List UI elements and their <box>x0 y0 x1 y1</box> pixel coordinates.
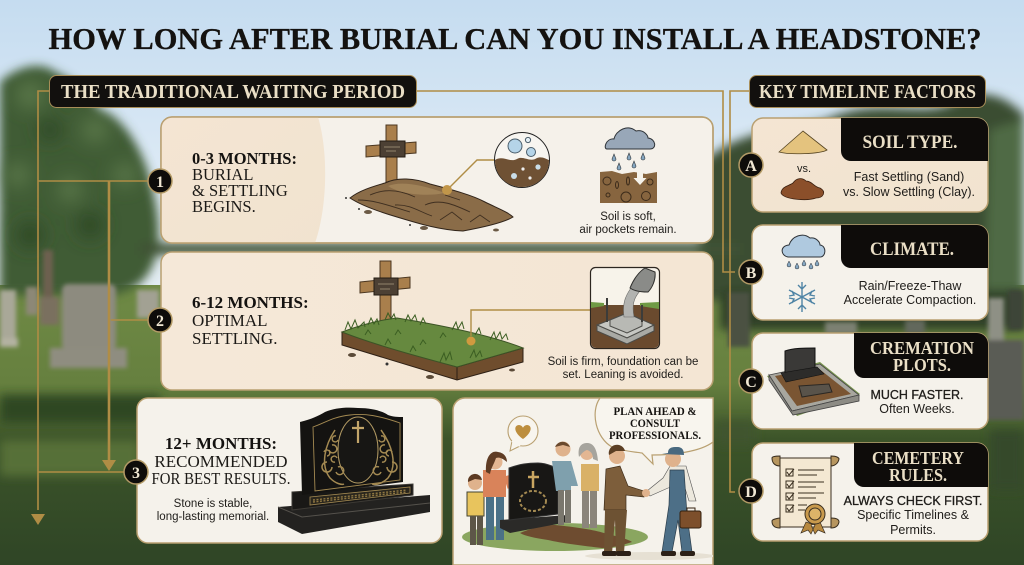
caption: stone is stable: Stone is stable, <box>174 498 252 510</box>
text: 6-12 months <box>192 293 309 348</box>
text: 0-3 months: & SETTLING <box>192 181 288 200</box>
panel: cremation plots <box>752 333 988 429</box>
text: cemetery detail: ALWAYS CHECK FIRST. <box>844 494 982 508</box>
icon: rain cloud and snowflake <box>782 235 825 312</box>
text: cemetery detail <box>844 494 982 537</box>
man in suit <box>604 466 644 510</box>
panel: 0-3 months <box>161 117 713 243</box>
heading: climate: CLIMATE. <box>870 239 954 260</box>
title: HOW LONG AFTER BURIAL CAN YOU INSTALL A HEADSTONE? <box>48 21 982 56</box>
heading: the traditional waiting period: THE TRADITIONAL WAITING PERIOD <box>61 81 405 103</box>
caption: stone is stable: long-lasting memorial. <box>157 511 269 523</box>
illustration: family, headstone and handshake <box>462 442 715 560</box>
caption: soil is soft <box>579 211 677 236</box>
text: climate detail <box>844 279 976 307</box>
panel: cemetery rules <box>752 443 988 541</box>
worker in overalls <box>647 466 696 501</box>
heading: cemetery rules: CEMETERY <box>872 448 964 468</box>
text: 12+ months: 12+ MONTHS: <box>165 434 277 453</box>
text: 0-3 months: BEGINS. <box>192 197 256 216</box>
text: 0-3 months <box>192 149 297 216</box>
panel: climate <box>752 225 988 320</box>
speech bubble: plan ahead: PROFESSIONALS. <box>609 430 701 442</box>
heading: key timeline factors <box>750 76 986 108</box>
text: 0-3 months: BURIAL <box>192 165 253 184</box>
factor badge B <box>739 260 763 284</box>
icon: cremation plot <box>767 348 860 416</box>
text: soil type detail: vs. Slow Settling (Clay). <box>843 185 975 199</box>
heading: cemetery rules <box>854 443 988 487</box>
step badge 3: 3 <box>132 465 140 482</box>
text: cremation detail: MUCH FASTER. <box>870 388 964 402</box>
text: 6-12 months: 6-12 MONTHS: <box>192 293 309 312</box>
text: 12+ months: RECOMMENDED <box>154 452 288 471</box>
icon: black granite headstone <box>278 408 430 534</box>
text: cremation detail: Often Weeks. <box>879 402 955 416</box>
heading: cremation plots: CREMATION <box>870 338 974 358</box>
text: 12+ months: FOR BEST RESULTS. <box>152 469 290 488</box>
icon: sand vs clay <box>779 131 827 200</box>
step badge 1 <box>148 169 172 193</box>
text: 12+ months <box>152 434 290 488</box>
step badge 2: 2 <box>156 313 164 330</box>
heading: soil type <box>841 118 988 161</box>
text: cemetery detail: Permits. <box>890 523 936 537</box>
caption: stone is stable <box>157 498 269 523</box>
heading: cremation plots <box>854 333 988 378</box>
factor badge B: B <box>746 265 757 282</box>
heading: cemetery rules: RULES. <box>889 465 947 485</box>
icon: rules scroll with seal <box>772 456 839 534</box>
caption: soil is firm: Soil is firm, foundation can be <box>548 356 698 368</box>
text: cemetery detail: Specific Timelines & <box>857 508 970 522</box>
factor badge A <box>739 153 763 177</box>
speech bubble: plan ahead: PLAN AHEAD & <box>614 406 697 418</box>
icon: cross on grassy plot <box>342 261 590 380</box>
heading: cremation plots: PLOTS. <box>893 355 951 375</box>
icon: sand vs clay: vs. <box>797 163 811 175</box>
text: cremation detail <box>870 388 964 416</box>
icon: rain cloud over soil <box>600 128 657 203</box>
factor badge D <box>739 479 763 503</box>
heading: the traditional waiting period <box>50 76 416 108</box>
heading: key timeline factors: KEY TIMELINE FACTORS <box>759 81 976 103</box>
family left <box>467 492 484 516</box>
step badge 1: 1 <box>156 174 164 191</box>
caption: soil is soft: air pockets remain. <box>579 224 677 236</box>
text: soil type detail <box>843 170 975 199</box>
connector lines and arrows <box>31 91 749 525</box>
factor badge C: C <box>745 374 757 391</box>
panel: 6-12 months <box>161 252 713 390</box>
factor badge C <box>739 369 763 393</box>
text: climate detail: Rain/Freeze-Thaw <box>859 279 962 293</box>
small headstone <box>500 515 568 533</box>
caption: soil is soft: Soil is soft, <box>600 211 656 223</box>
heading: climate <box>841 225 988 268</box>
step badge 2 <box>148 308 172 332</box>
text: climate detail: Accelerate Compaction. <box>844 293 976 307</box>
icon: wooden cross on soil mound <box>345 125 513 232</box>
factor badge A: A <box>745 158 757 175</box>
panel: 12+ months <box>137 398 442 543</box>
text: 6-12 months: SETTLING. <box>192 329 277 348</box>
speech bubble: plan ahead: CONSULT <box>630 418 680 430</box>
icon: pouring concrete foundation <box>590 268 660 348</box>
factor badge D: D <box>745 484 757 501</box>
couple <box>552 461 578 491</box>
speech bubble: plan ahead <box>595 398 713 464</box>
text: soil type detail: Fast Settling (Sand) <box>854 170 964 184</box>
heading: soil type: SOIL TYPE. <box>862 132 958 153</box>
step badge 3 <box>124 460 148 484</box>
caption: soil is firm <box>548 356 698 381</box>
text: 0-3 months: 0-3 MONTHS: <box>192 149 297 168</box>
callout: soil close-up <box>442 132 550 195</box>
text: 6-12 months: OPTIMAL <box>192 311 268 330</box>
icon: heart bubble <box>508 416 538 451</box>
caption: soil is firm: set. Leaning is avoided. <box>563 369 683 381</box>
panel: plan ahead illustration <box>453 398 715 565</box>
panel: soil type <box>752 118 988 212</box>
